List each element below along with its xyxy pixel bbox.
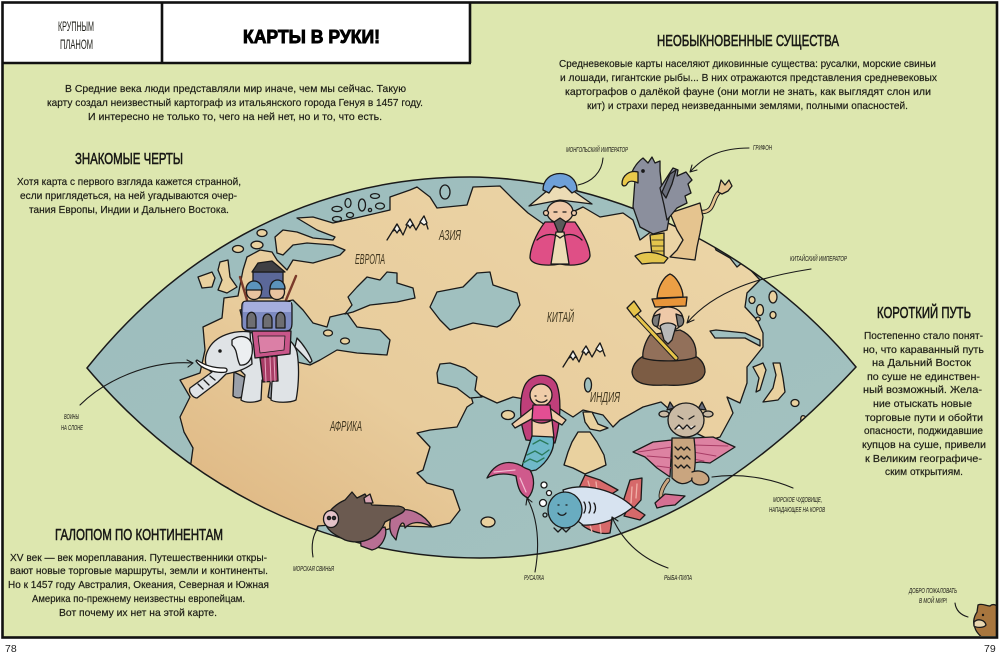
text block: across continents: Америка по-прежнему неизвестны европейцам. [32, 593, 245, 605]
land masses [179, 184, 806, 530]
text block: unusual creatures [559, 33, 938, 112]
panel: section tag: КРУПНЫМ [58, 18, 94, 34]
map label: India: ИНДИЯ [590, 389, 620, 406]
eastern inlet [710, 330, 760, 346]
text block: familiar features [17, 151, 241, 216]
text block: familiar features: Хотя карта с первого взгляда кажется странной, [17, 176, 241, 188]
illustration: war elephant [190, 261, 312, 402]
intro text: карту создал неизвестный картограф из итальянского города Генуя в 1457 году. [47, 97, 423, 109]
caption: Chinese emperor: КИТАЙСКИЙ ИМПЕРАТОР [790, 254, 847, 263]
text block: short route: ским открытиям. [885, 466, 963, 478]
text block: short route: торговые пути и обойти [865, 412, 983, 424]
Black sea [345, 272, 415, 314]
text block: short route: купцов на суше, привели [862, 439, 986, 451]
caption: warriors on elephant: ВОИНЫ [64, 412, 79, 421]
Red sea inlet [437, 363, 482, 398]
Eurasia and Africa [180, 186, 763, 570]
mascot: bear greeting: ДОБРО ПОЖАЛОВАТЬ [908, 586, 957, 595]
text block: short route: по суше не единствен- [867, 371, 981, 383]
intro text [47, 83, 423, 123]
map: medieval lens-shaped world map [87, 177, 856, 570]
map label: China: КИТАЙ [547, 308, 574, 326]
text block: unusual creatures: кит) и страхи перед неизведанными землями, полными опасностей. [587, 100, 908, 112]
mountains: India [563, 343, 605, 367]
intro text: В Средние века люди представляли мир иначе, чем мы сейчас. Такую [65, 83, 406, 95]
caption: Chinese emperor [687, 254, 847, 323]
text block: across continents: вают новые торговые маршруты, земли и континенты. [10, 565, 268, 577]
heading strip [2, 2, 471, 63]
Caspian lake [430, 272, 520, 330]
ocean [87, 177, 856, 558]
text block: familiar features: тания Европы, Индии и Дальнего Востока. [29, 204, 229, 216]
map outline [87, 177, 856, 558]
mascot: bear greeting: В МОЙ МИР! [919, 596, 948, 605]
caption: Mongol emperor: МОНГОЛЬСКИЙ ИМПЕРАТОР [566, 145, 628, 154]
panel: section tag: ПЛАНОМ [60, 36, 93, 52]
illustration: sea monster [633, 402, 735, 508]
text block: short route: ние отыскать новые [873, 398, 972, 410]
caption: Mongol emperor [566, 145, 628, 185]
intro text: И интересно не только то, чего на ней нет, но и то, что есть. [88, 111, 382, 123]
text block: across continents: Но к 1457 году Австралия, Океания, Северная и Южная [8, 579, 269, 591]
illustration: saw-fish [540, 475, 645, 533]
text block: short route: опасности, поджидавшие [864, 425, 983, 437]
Mediterranean sea [240, 300, 390, 365]
panel: page title [162, 2, 470, 63]
western islands [198, 230, 350, 344]
panel: section tag [2, 2, 162, 63]
text block: short route: к Великим географиче- [865, 453, 983, 465]
lake near India [584, 378, 592, 392]
caption: saw-fish: РЫБА-ПИЛА [664, 573, 692, 582]
map label: Asia: АЗИЯ [438, 227, 461, 244]
caption: mermaid [524, 498, 544, 582]
map label: Africa: АФРИКА [329, 418, 362, 435]
illustration: griffin [622, 157, 732, 264]
caption: griffin: ГРИФОН [753, 143, 772, 152]
text block: across continents: Вот почему их нет на этой карте. [59, 607, 217, 619]
illustration: Chinese emperor [627, 274, 705, 385]
map: medieval lens-shaped world map: ЕВРОПА [355, 251, 385, 268]
northern islands [332, 185, 450, 222]
text block: unusual creatures: НЕОБЫКНОВЕННЫЕ СУЩЕСТВА [657, 33, 839, 50]
caption: sea monster [712, 476, 825, 514]
southern and eastern islands [481, 291, 813, 527]
text block: familiar features: ЗНАКОМЫЕ ЧЕРТЫ [75, 151, 183, 168]
text block: short route [862, 303, 986, 478]
caption: sea monster: НАПАДАЮЩЕЕ НА КОРОВ [769, 505, 825, 514]
mascot: bear greeting [908, 588, 996, 636]
caption: saw-fish [611, 517, 692, 582]
text block: short route: ный возможный. Жела- [863, 384, 983, 396]
caption: warriors on elephant [61, 360, 193, 432]
caption: sea monster: МОРСКОЕ ЧУДОВИЩЕ, [773, 495, 822, 504]
caption: mermaid: РУСАЛКА [524, 573, 544, 582]
panel: page title: КАРТЫ В РУКИ! [243, 27, 380, 47]
caption: griffin [690, 143, 772, 172]
text block: unusual creatures: Средневековые карты населяют диковинные существа: русалки, морские свиньи [559, 58, 936, 70]
text block: unusual creatures: и лошади, гигантские рыбы... В них отражаются представления средневековых [560, 72, 938, 84]
text block: familiar features: если приглядеться, на ней угадываются очер- [20, 190, 237, 202]
text block: across continents: ГАЛОПОМ ПО КОНТИНЕНТАМ [55, 527, 223, 544]
text block: unusual creatures: картографов о далёкой фауне (они могли не знать, как выглядят слон или [565, 86, 931, 98]
illustration: sea pig [324, 492, 432, 550]
text block: short route: на Дальний Восток [872, 357, 971, 369]
illustration: Mongol emperor [529, 174, 592, 265]
mountains: Asia [387, 216, 428, 240]
text block: across continents: XV век — век мореплавания. Путешественники откры- [10, 552, 267, 564]
caption: sea pig [293, 528, 335, 573]
text block: short route: но, что караванный путь [863, 344, 985, 356]
text block: short route: Постепенно стало понят- [864, 330, 983, 342]
illustration: mermaid [487, 375, 566, 498]
caption: sea pig: МОРСКАЯ СВИНЬЯ [293, 564, 335, 573]
text block: across continents [8, 527, 269, 619]
caption: warriors on elephant: НА СЛОНЕ [61, 423, 84, 432]
